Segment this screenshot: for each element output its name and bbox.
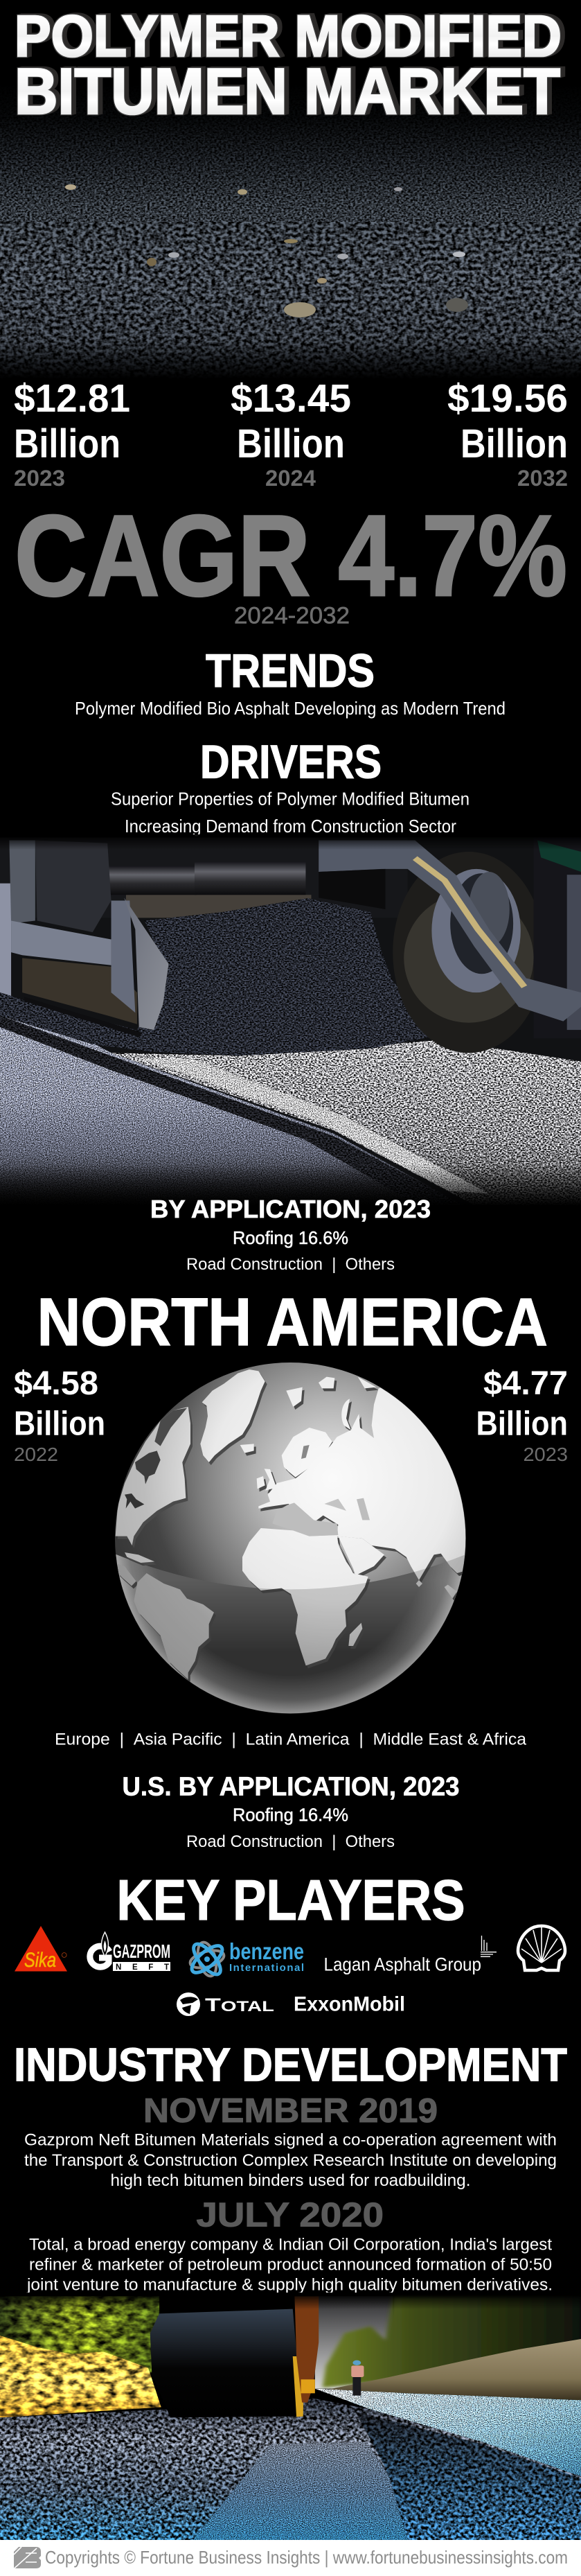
sky [315,2296,393,2389]
drivers: Superior Properties of Polymer Modified Bitumen [111,789,470,809]
key players heading: KEY PLAYERS [116,1868,465,1932]
trends: Polymer Modified Bio Asphalt Developing as Modern Trend [75,698,506,719]
trees left [0,2296,159,2372]
development: July 2020 [26,2197,553,2295]
logo: Gazprom Neft: NEFT [116,1963,169,1972]
arm bracket [319,840,581,1022]
blue road [315,2389,581,2476]
roller drum [150,2309,302,2417]
roller body [294,2296,319,2403]
centre strip [193,2442,408,2540]
photo top fade [0,2293,581,2309]
by application [150,1195,431,1274]
stat 2032: 2032 [517,466,568,491]
logo: ExxonMobil: ExxonMobil [294,1993,405,2016]
logo: Benzene International: benzene [229,1938,304,1964]
north america value 2023: $4.77 [483,1365,568,1402]
dark seam [0,1015,463,1205]
U.S. by application: Road Construction | Others [186,1832,395,1851]
logo: Total [177,1992,274,2016]
screed frame [9,840,168,1037]
logo: Shell [518,1926,565,1970]
development: November 2019 [24,2092,557,2190]
stat 2032 [447,376,568,491]
development: November 2019: high tech bitumen binders used for roadbuilding. [111,2171,471,2190]
stat 2024: $13.45 [231,376,351,421]
other regions: Europe | Asia Pacific | Latin America | Middle East & Africa [55,1730,527,1749]
north america value 2022: $4.58 [14,1365,98,1402]
logo: Gazprom Neft [90,1932,170,1972]
worker [351,2360,364,2396]
logo: Gazprom Neft: GAZPROM [113,1940,170,1962]
tyre [393,852,545,1053]
stat 2024 [231,376,351,491]
white streak [141,1059,489,1193]
drivers: Increasing Demand from Construction Sector [125,816,456,836]
by application: Road Construction | Others [186,1255,395,1274]
logo: Lagan Asphalt Group: Lagan Asphalt Group [324,1954,481,1974]
north america value 2023: 2023 [524,1444,568,1465]
development: November 2019: Gazprom Neft Bitumen Materials signed a co-operation agreement with [24,2131,557,2150]
stat 2023: $12.81 [14,376,130,421]
stat 2023: 2023 [14,466,65,491]
icon: Fortune Business Insights [14,2547,41,2568]
footer [0,2540,581,2576]
market size stats [14,376,568,491]
north america value 2022: 2022 [14,1444,58,1465]
by application: Roofing 16.6% [233,1227,348,1248]
development: July 2020: refiner & marketer of petroleum product announced formation of 50:50 [29,2256,552,2275]
title: POLYMER MODIFIED [15,3,562,69]
stat 2032: Billion [461,421,568,466]
hot asphalt pile [0,898,437,1055]
CAGR callout: 2024-2032 [234,603,350,629]
development: July 2020: joint venture to manufacture & supply high quality bitumen derivatives. [26,2276,553,2295]
U.S. by application: Roofing 16.4% [233,1805,348,1825]
north america value 2023 [476,1365,568,1465]
development: November 2019: the Transport & Construction Complex Research Institute on developing [24,2151,557,2170]
title [15,3,562,128]
stat 2024: 2024 [265,466,316,491]
photo: road paver laying asphalt [0,837,581,1205]
logo: Sika: Sika [24,1949,56,1972]
logo: Benzene International [188,1938,304,1979]
stat 2024: Billion [237,421,345,466]
foreground asphalt [0,2398,581,2540]
icon: world globe [111,1358,482,1719]
hydraulic cylinder [107,862,305,895]
U.S. by application [122,1773,460,1851]
development: July 2020: Total, a broad energy company & Indian Oil Corporation, India's largest [29,2236,552,2254]
photo: asphalt surface [0,83,581,385]
development: November 2019: NOVEMBER 2019 [143,2092,438,2130]
dark roller track [356,2412,581,2540]
pale scraped strip [111,1040,581,1205]
trends [75,645,506,719]
logo: Lagan Asphalt Group [324,1936,497,1974]
trends: TRENDS [206,645,375,697]
logo: Total: T OTAL [205,1995,274,2015]
yellow handle [415,858,524,987]
north america value 2023: Billion [476,1405,568,1443]
embankment right [326,2339,581,2400]
stat 2032: $19.56 [447,376,568,421]
logo: Sika [15,1926,67,1972]
trees right [323,2296,581,2387]
road surface [0,992,463,1205]
drivers: DRIVERS [200,736,382,789]
drivers [111,736,470,836]
by application: BY APPLICATION, 2023 [150,1195,431,1223]
development: July 2020: JULY 2020 [197,2197,384,2234]
stat 2023 [14,376,130,491]
north america value 2022: Billion [14,1405,105,1443]
stat 2023: Billion [14,421,120,466]
paver body right [534,837,581,1039]
U.S. by application: U.S. BY APPLICATION, 2023 [122,1773,460,1802]
photo: road roller on fresh asphalt [0,2296,581,2540]
yellow hill [0,2336,161,2417]
logo: Benzene International: International [229,1962,304,1974]
photo fades [0,834,581,1233]
north america value 2022 [14,1365,105,1465]
